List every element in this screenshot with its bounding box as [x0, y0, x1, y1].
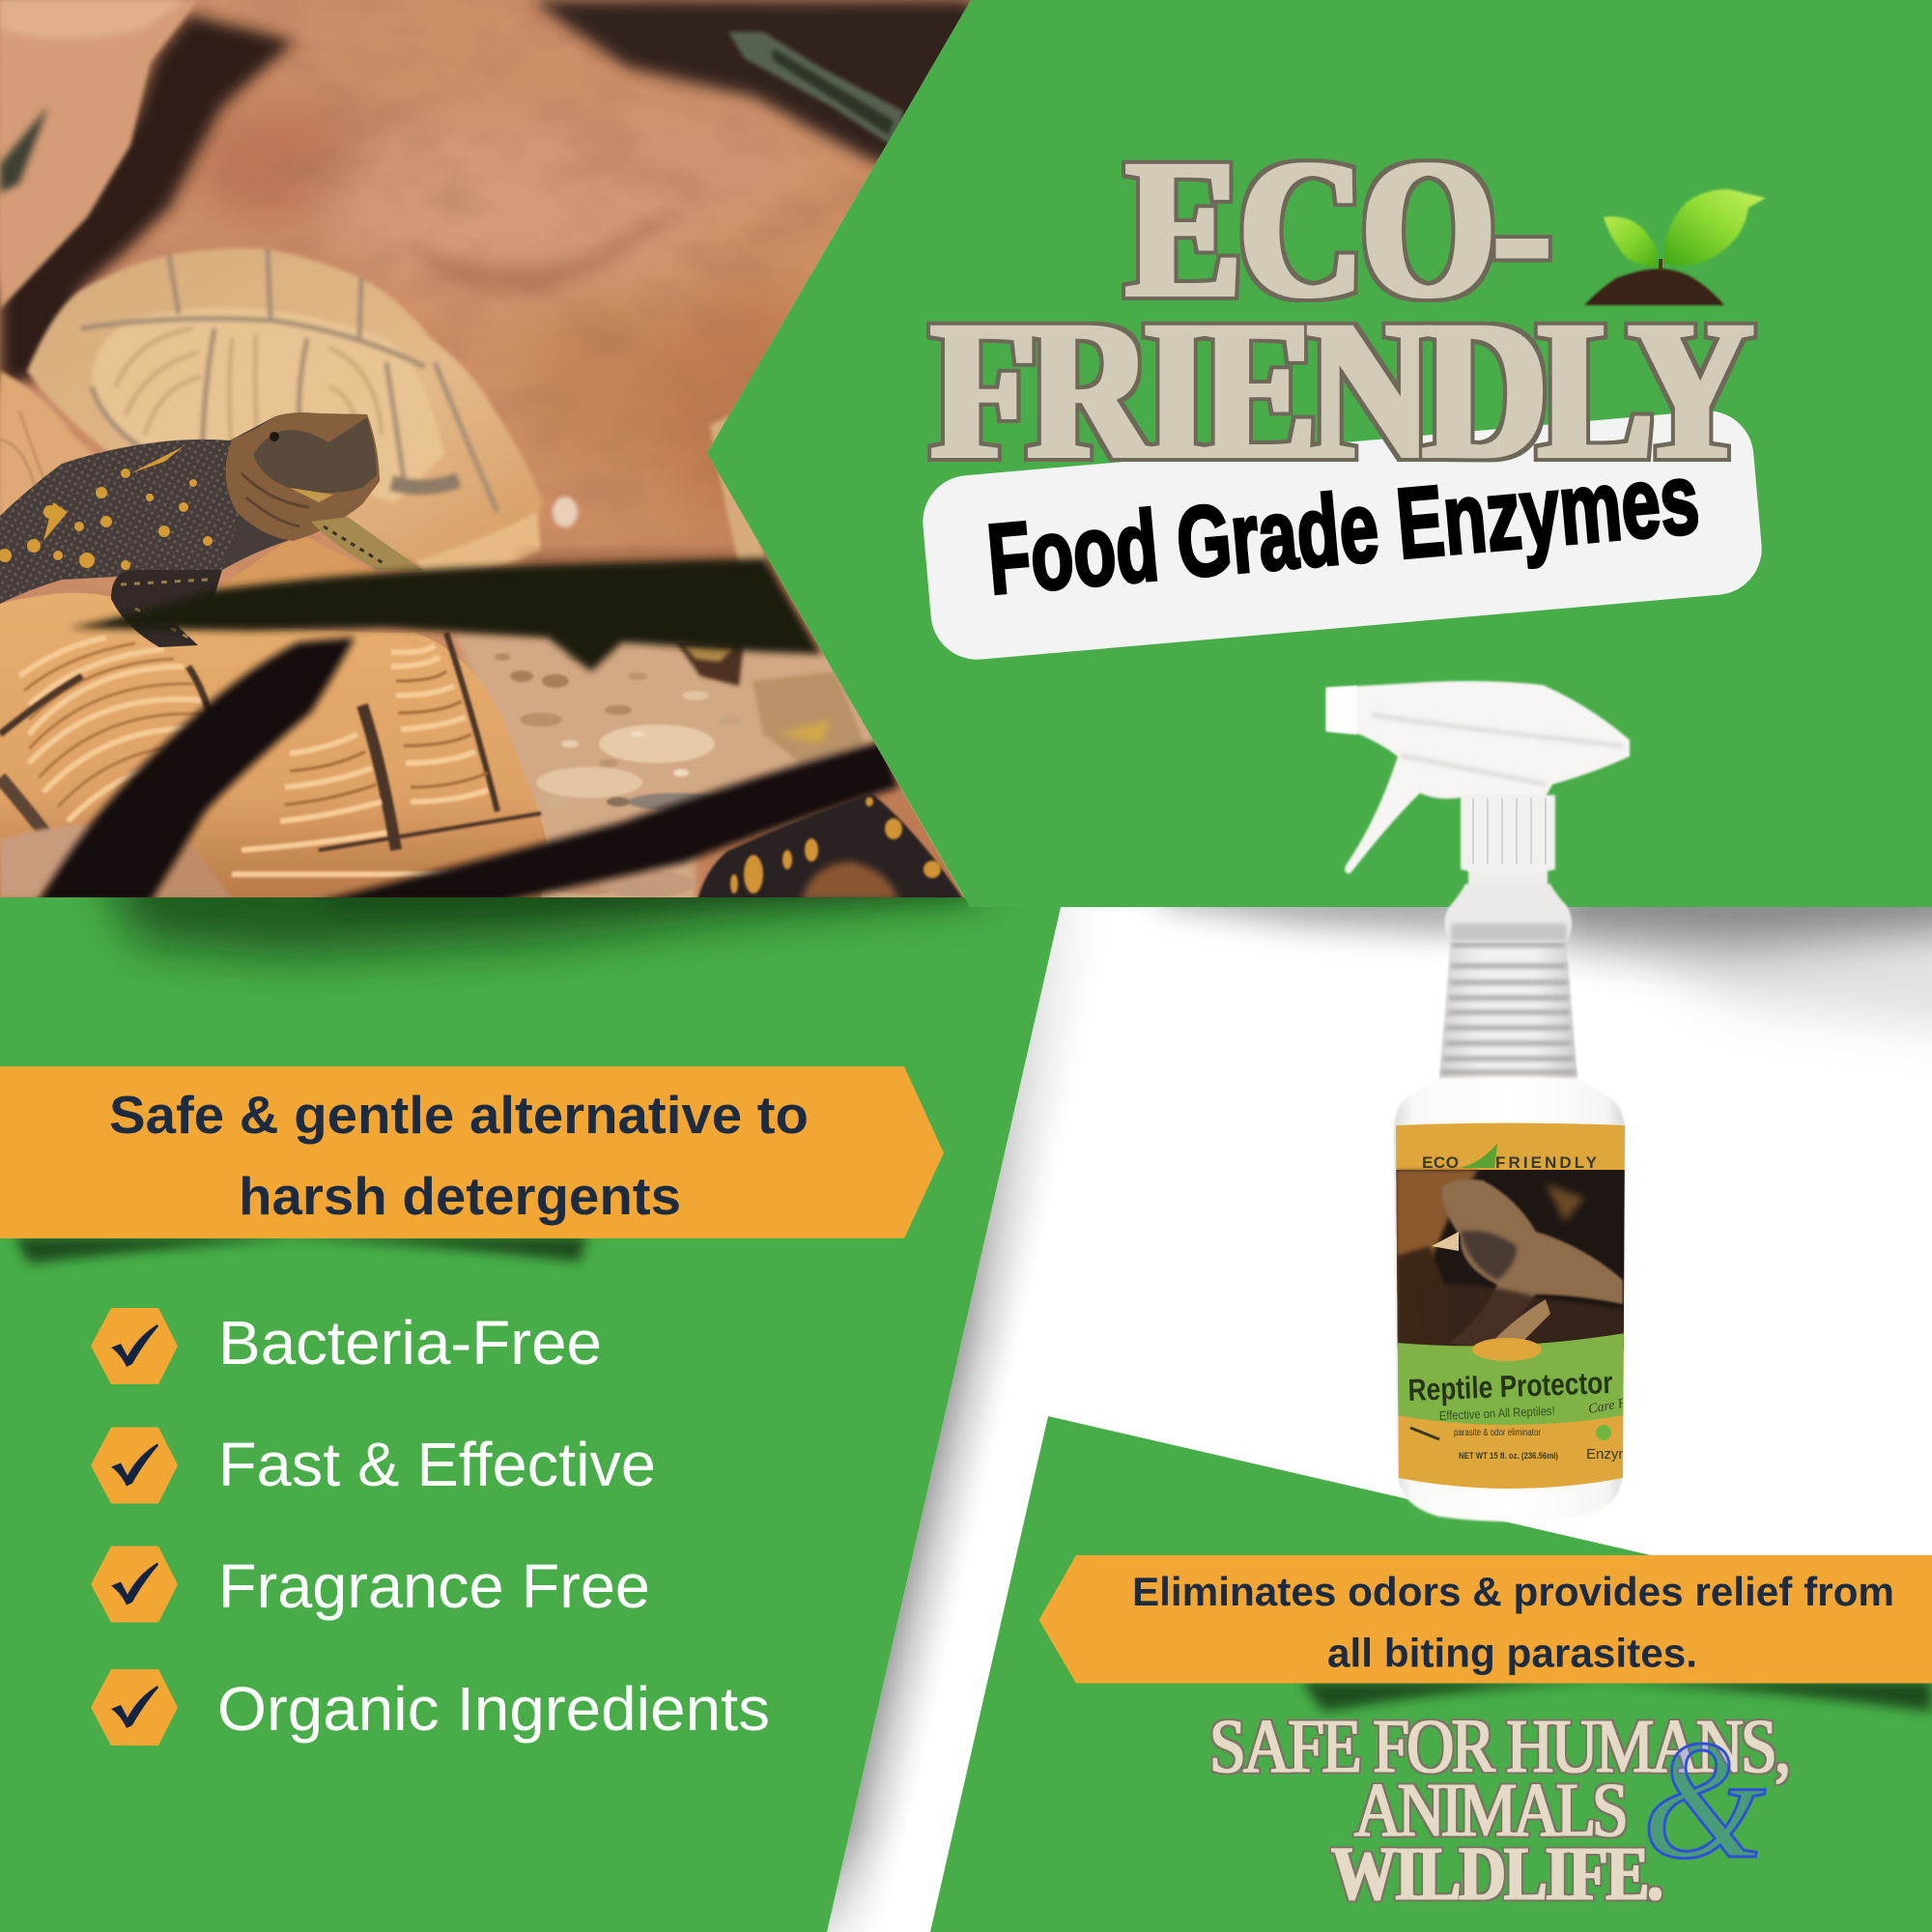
dark leaf horizontal	[69, 558, 821, 671]
lizard spots	[0, 446, 213, 570]
banner: safe and gentle: harsh detergents	[239, 1166, 681, 1226]
rock crease shadow	[417, 222, 655, 298]
ampersand: &	[1642, 1706, 1766, 1894]
panel: white area soft shadows	[827, 865, 1932, 1932]
product label: Enzymes	[1586, 1446, 1646, 1463]
banner shadow right	[1301, 1681, 1932, 1712]
check item: fast and effective: Fast & Effective	[218, 1430, 656, 1499]
bottom-left rock	[0, 825, 101, 897]
callout: food grade enzymes pill	[919, 407, 1766, 664]
check item: bacteria-free: Bacteria-Free	[218, 1308, 602, 1378]
check item: fast and effective	[91, 1428, 656, 1503]
dark crevice	[0, 14, 295, 386]
banner: eliminates odors	[1039, 1555, 1932, 1683]
front shell left ridges	[19, 638, 217, 845]
shadow below photo	[97, 850, 985, 956]
plant spear top right	[728, 32, 903, 150]
tagline: safe for humans, animals and wildlife: ANIMALS	[1354, 1767, 1629, 1852]
left rock	[0, 0, 198, 309]
label photo	[1396, 1170, 1628, 1351]
rock highlights and blotches	[184, 106, 840, 522]
right background tortoise-lizard	[753, 671, 865, 763]
panel: bottom-left green area	[0, 850, 1061, 1932]
tagline: safe for humans, animals and wildlife: SAFE FOR HUMANS,	[1209, 1703, 1791, 1788]
rock shelf shadow above leaf	[522, 553, 773, 576]
lizard on shell	[0, 412, 423, 647]
panel: bottom-right green area	[930, 1416, 1932, 1932]
lit shell under lizard	[217, 533, 406, 618]
product label: FRIENDLY	[1495, 1153, 1598, 1172]
tan object right	[710, 415, 768, 570]
dark leaf diagonal right	[311, 741, 898, 903]
bottle neck connector	[1468, 865, 1548, 894]
left small shell	[0, 371, 94, 526]
banner: safe and gentle: Safe & gentle alternative to	[109, 1085, 809, 1145]
pebble by back shell	[553, 497, 578, 527]
checklist	[91, 1308, 770, 1746]
bottom right lizard	[696, 793, 966, 903]
icon: seedling with soil	[1584, 189, 1766, 305]
title: eco-friendly: ECO-	[1126, 119, 1550, 338]
lizard head	[226, 412, 380, 541]
dark cave top right	[526, 0, 971, 172]
bottle body	[1394, 1078, 1625, 1521]
check item: organic ingredients: Organic Ingredients	[217, 1674, 770, 1744]
product label: parasite & odor eliminator	[1454, 1428, 1542, 1438]
front shell dark seams	[0, 633, 541, 850]
rock texture	[12, 5, 864, 599]
product label	[1391, 1121, 1646, 1507]
title: eco-friendly	[931, 119, 1753, 499]
tagline: safe for humans, animals and wildlife: WILDLIFE.	[1331, 1831, 1663, 1916]
label text: ECO	[1422, 1153, 1459, 1172]
product: spray bottle	[1326, 681, 1646, 1521]
banner: eliminates odors: all biting parasites.	[1327, 1631, 1697, 1675]
check item: fragrance free	[91, 1546, 650, 1623]
lizard body	[0, 412, 380, 604]
lizard rear legs	[111, 570, 222, 647]
front shell stripes right	[232, 645, 502, 874]
banner: safe and gentle	[0, 1066, 944, 1238]
dark leaf diagonal left	[38, 638, 355, 903]
ground gravel	[454, 633, 879, 903]
banner: eliminates odors: Eliminates odors & provides relief from	[1132, 1569, 1894, 1614]
bottle flange	[1445, 884, 1572, 942]
spray trigger and head	[1326, 681, 1630, 873]
check item: bacteria-free	[91, 1308, 602, 1384]
ribbed neck	[1439, 927, 1577, 1078]
tagline: safe for humans, animals and wildlife	[1209, 1703, 1791, 1916]
banner shadow left	[14, 1236, 587, 1264]
back tortoise shell	[27, 248, 543, 576]
product label: Effective on All Reptiles!	[1438, 1404, 1555, 1423]
product label: NET WT 15 fl. oz. (236.56ml)	[1459, 1451, 1558, 1461]
title: eco-friendly: FRIENDLY	[931, 280, 1753, 499]
gravel speckles	[495, 652, 741, 897]
product label: Care Free	[1587, 1393, 1644, 1417]
spray collar	[1461, 795, 1555, 875]
label green band	[1396, 1333, 1625, 1425]
panel: top-right green chevron	[707, 0, 1932, 907]
product label: Reptile Protector	[1407, 1365, 1613, 1407]
check item: fragrance free: Fragrance Free	[218, 1551, 650, 1621]
panel: top-left reptile photograph	[0, 0, 976, 903]
front tortoise shell	[0, 593, 548, 897]
